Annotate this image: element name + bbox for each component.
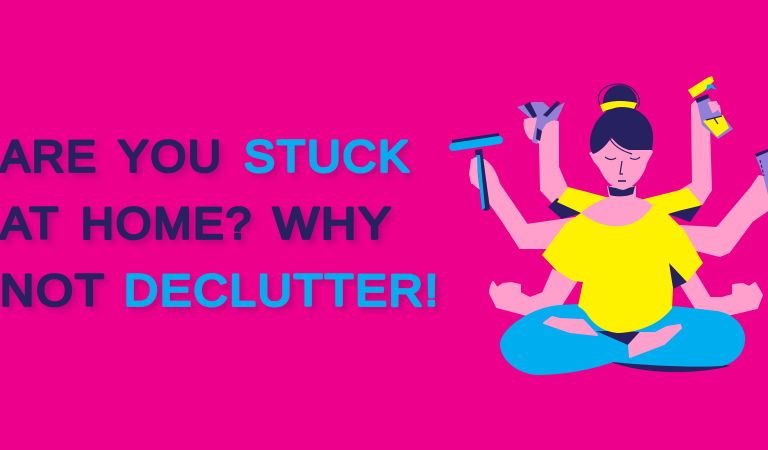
line 3: not declutter!: DECLUTTER! xyxy=(124,266,440,316)
left foot xyxy=(544,317,597,335)
line 1: are you stuck: YOU xyxy=(118,132,223,182)
dark gap between legs xyxy=(596,331,640,345)
neck and chest xyxy=(581,186,653,226)
line 1: are you stuck: STUCK xyxy=(244,132,411,182)
line 1: are you stuck xyxy=(0,132,411,182)
line 2: at home? why: WHY xyxy=(273,200,393,248)
arm: lower left in mudra xyxy=(490,270,576,315)
icon: cup xyxy=(755,149,768,195)
arm: raised left holding rag xyxy=(525,117,567,206)
facial features xyxy=(605,139,640,181)
hair xyxy=(590,107,653,154)
yellow t-shirt xyxy=(542,187,703,333)
legs xyxy=(500,304,745,375)
choker xyxy=(608,186,635,196)
arm: raised right holding spray bottle xyxy=(678,100,720,204)
line 3: not declutter!: NOT xyxy=(0,266,106,316)
line 2: at home? why: AT xyxy=(0,200,60,248)
line 3: not declutter! xyxy=(0,266,440,316)
line 2: at home? why xyxy=(0,200,393,248)
face xyxy=(589,133,653,190)
icon: spray bottle xyxy=(688,76,733,139)
line 1: are you stuck: ARE xyxy=(0,132,98,182)
shadow under legs xyxy=(611,355,730,372)
arm: lower right in mudra xyxy=(680,270,762,316)
title xyxy=(0,132,440,316)
illustration: woman with six arms meditating xyxy=(452,76,768,375)
icon: rag xyxy=(517,101,565,144)
hair bun xyxy=(598,84,639,119)
shirt back sleeves, dark xyxy=(548,195,702,222)
arm: right holding cup xyxy=(680,176,768,256)
sleeve shadows xyxy=(573,263,687,289)
icon: squeegee xyxy=(452,133,499,211)
arm: upper left holding squeegee xyxy=(471,160,580,248)
line 2: at home? why: HOME? xyxy=(81,200,253,248)
right foot xyxy=(629,325,681,357)
hair tie xyxy=(600,101,637,112)
